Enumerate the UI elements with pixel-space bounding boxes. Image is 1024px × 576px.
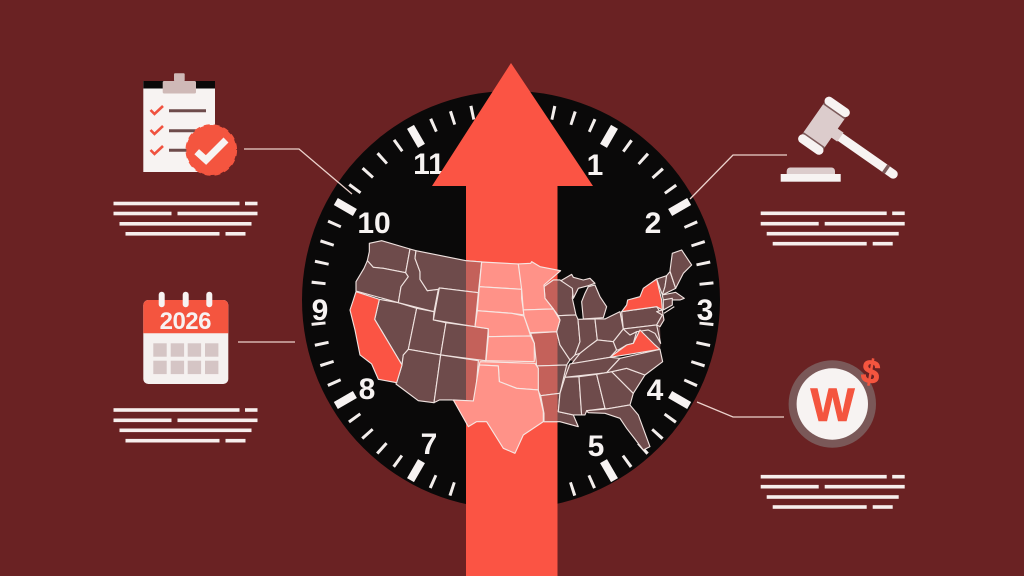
text placeholder lines [761,212,905,246]
states outside highlighted groups [356,241,692,450]
panel: wage icon bottom right [697,352,905,509]
clock numerals: 4 [647,374,664,407]
connector line [244,149,352,194]
text placeholder lines [114,408,258,442]
clock numerals: 7 [421,428,437,461]
clock numerals: 1 [587,149,603,182]
icon: W coin with dollar sign: W [810,378,855,431]
icon: W coin with dollar sign: $ [859,352,883,391]
panel: gavel top right [690,95,913,246]
icon: clipboard [143,73,236,175]
icon: calendar 2026: 2026 [160,308,211,335]
text placeholder lines [761,475,905,509]
connector line [238,341,295,343]
text placeholder lines [114,202,258,236]
map of United States [350,241,692,453]
clock numerals: 3 [697,294,713,327]
highlighted central states [453,262,561,453]
icon: gavel [781,95,913,199]
clock numerals: 8 [359,373,375,406]
clock numerals: 11 [413,148,445,181]
clock dial [302,91,720,509]
red highlighted states: California, New York, Virginia [350,279,662,383]
icon: calendar 2026 [143,292,228,384]
clock numerals: 2 [645,207,661,240]
grey states tinted through arrow [466,260,558,422]
clock numerals: 9 [312,294,328,327]
clock numerals: 5 [588,430,604,463]
red upward arrow [432,63,593,576]
connector line [697,402,784,417]
clock numerals [312,148,713,463]
panel: calendar left [114,292,295,442]
icon: W coin with dollar sign [789,352,883,448]
clock numerals: 10 [357,207,391,240]
panel: clipboard top left [114,73,352,236]
connector line [690,155,787,199]
